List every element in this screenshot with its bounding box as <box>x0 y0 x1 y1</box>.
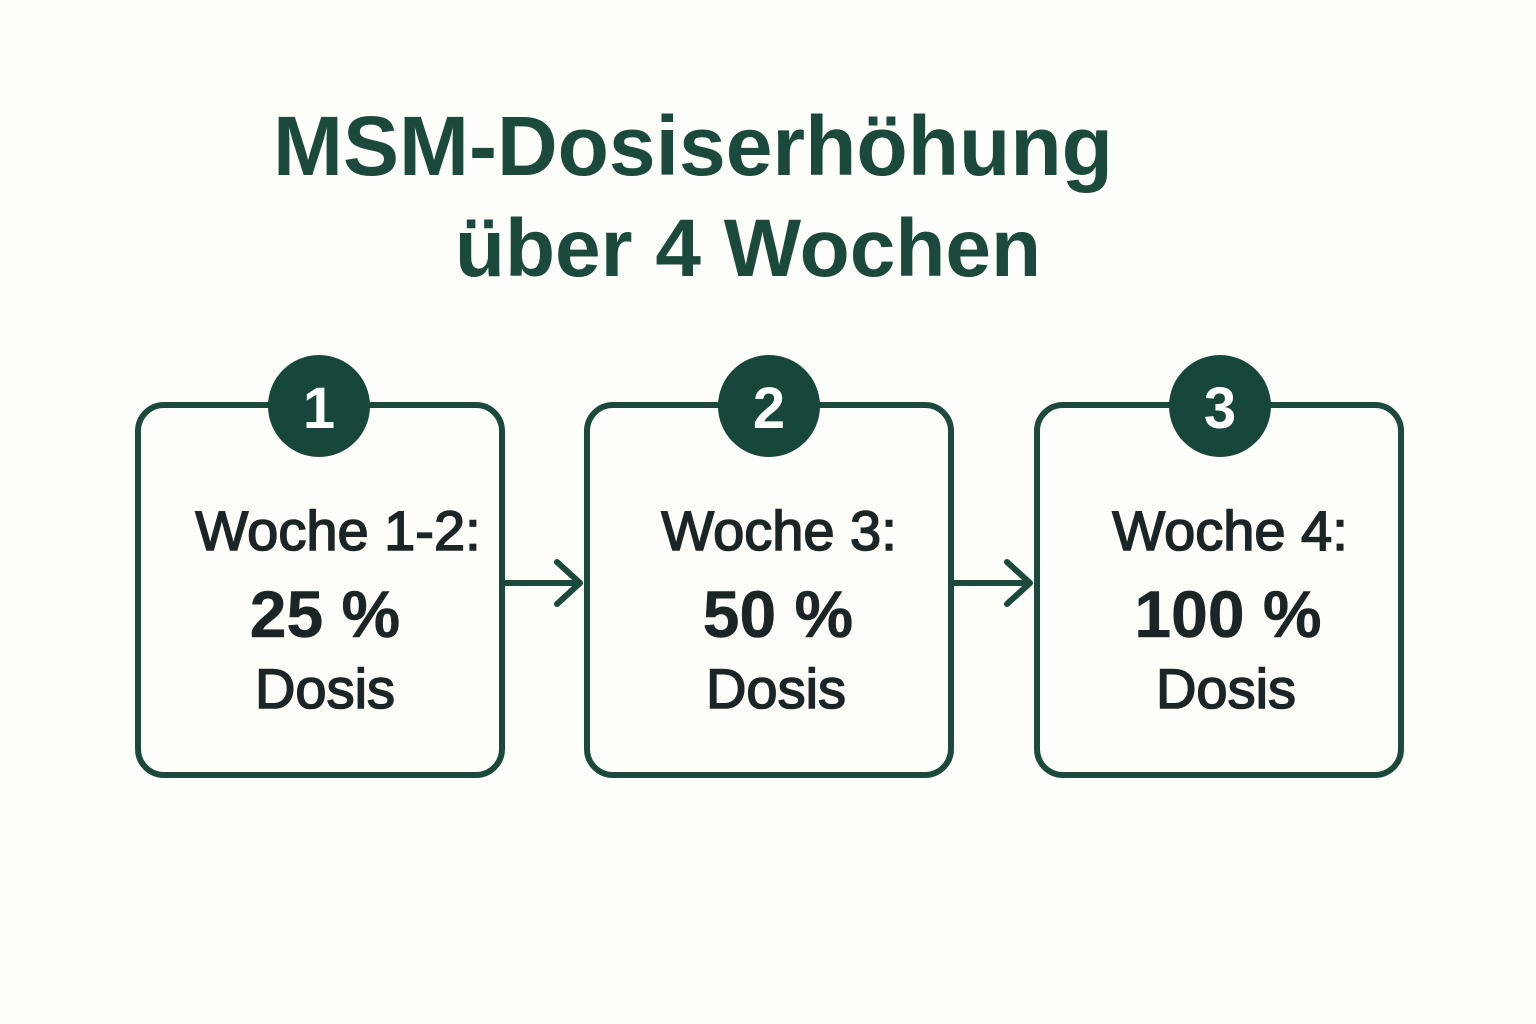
title: MSM-Dosiserhöhung <box>273 99 1113 193</box>
text: step 2: Woche 3: <box>661 499 897 562</box>
arrow: step 2 to 3 <box>953 562 1030 604</box>
title: über 4 Wochen <box>455 203 1041 294</box>
text: step 3: Woche 4: <box>1112 499 1348 562</box>
text: step 1: Woche 1-2: <box>195 499 481 562</box>
text: step 3 <box>1112 499 1348 720</box>
panel: step 3 <box>1037 355 1401 775</box>
text: step 2 <box>661 499 897 720</box>
text: step 3: 100 % <box>1134 577 1322 651</box>
icon: number 1: 1 <box>303 376 335 441</box>
icon: number 1 <box>268 355 370 457</box>
text: step 3: Dosis <box>1156 657 1296 720</box>
icon: number 2: 2 <box>753 376 785 441</box>
text: step 1 <box>195 499 481 720</box>
text: step 1: Dosis <box>255 657 395 720</box>
icon: number 2 <box>718 355 820 457</box>
icon: number 3 <box>1169 355 1271 457</box>
text: step 2: Dosis <box>706 657 846 720</box>
text: step 2: 50 % <box>703 577 853 651</box>
title <box>273 99 1113 294</box>
panel: step 2 <box>587 355 951 775</box>
arrow: step 1 to 2 <box>503 562 580 604</box>
panel: step 1 <box>138 355 502 775</box>
text: step 1: 25 % <box>250 577 400 651</box>
icon: number 3: 3 <box>1204 376 1236 441</box>
